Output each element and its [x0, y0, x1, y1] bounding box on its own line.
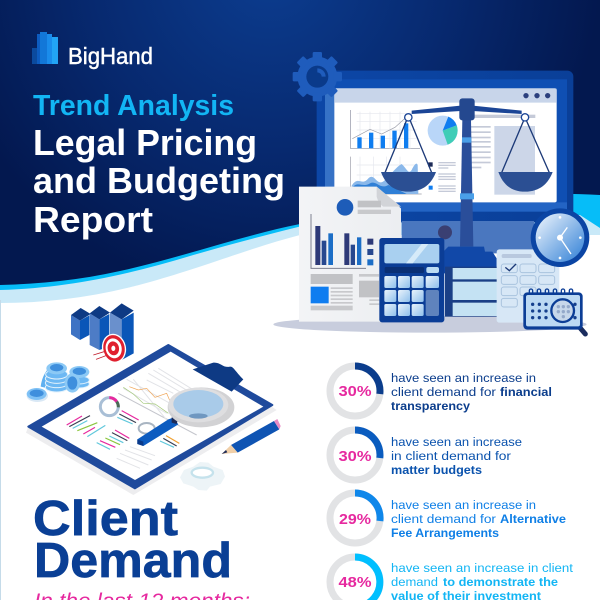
stat: 30% matter budgets: have seen an increase: [391, 435, 522, 449]
books: [445, 267, 498, 317]
shadow: [273, 316, 587, 333]
illustration: finance desk: [273, 42, 589, 334]
light blue wave: [0, 200, 600, 303]
heading: Trend Analysis: Trend Analysis: [33, 90, 234, 122]
title: Legal Pricing and Budgeting Report: Legal Pricing: [33, 122, 257, 163]
bar pillars: [71, 303, 134, 360]
title: Legal Pricing and Budgeting Report: and Budgeting: [33, 160, 285, 201]
clipboard: report charts: [67, 368, 203, 468]
document: [299, 187, 401, 322]
illustration: clipboard analysis: [26, 303, 281, 495]
stat: 29% alternative fee arrangements: have seen an increase in: [391, 498, 536, 512]
icon: target: [93, 331, 129, 365]
stat: 30% financial transparency: have seen an increase in: [391, 371, 536, 385]
stat: 30% financial transparency: client demand for: [391, 385, 496, 399]
stat: 30% matter budgets: 30%: [338, 448, 372, 465]
left edge line: [0, 300, 1, 600]
stat: 48% value of investment: 48%: [338, 574, 372, 591]
stat: 29% alternative fee arrangements: client demand for: [391, 512, 496, 526]
stat: 30% matter budgets: [330, 430, 522, 480]
screen: area chart: [350, 157, 422, 194]
stat: 29% alternative fee arrangements: [330, 493, 566, 543]
stat: 30% financial transparency: financial: [500, 385, 552, 399]
wall calendar: [497, 249, 559, 323]
stat: 30% financial transparency: transparency: [391, 399, 470, 413]
logo: BigHand: [32, 32, 153, 69]
stand: [402, 221, 534, 253]
cyan wave: [0, 190, 600, 290]
screen: text lines: [428, 115, 535, 195]
logo: BigHand: BigHand: [68, 43, 153, 69]
header background: [0, 0, 600, 285]
stat: 30% matter budgets: in client demand for: [391, 449, 511, 463]
magnifying glass: [137, 387, 234, 446]
icon: gear: [282, 42, 352, 112]
clipboard: [26, 345, 277, 495]
heading: Client Demand: Client: [33, 492, 178, 546]
stat: 48% value of investment: have seen an increase in client: [391, 561, 574, 575]
heading: Client Demand: [33, 492, 232, 588]
stat: 30% matter budgets: matter budgets: [391, 463, 482, 477]
calculator: [379, 238, 444, 322]
pencil: [222, 419, 281, 454]
screen: bar chart: [350, 110, 420, 148]
stat: 29% alternative fee arrangements: 29%: [339, 511, 371, 528]
screen: pie chart: [428, 116, 458, 146]
stat: 48% value of investment: to demonstrate the: [443, 575, 558, 589]
title: Legal Pricing and Budgeting Report: Report: [33, 199, 153, 240]
monitor: [317, 71, 573, 253]
scales of justice: [381, 98, 553, 273]
stat: 29% alternative fee arrangements: Alternative: [500, 512, 566, 526]
clock: [531, 208, 589, 267]
gear: [180, 462, 225, 491]
title: Legal Pricing and Budgeting Report: [33, 122, 285, 240]
stat: 30% financial transparency: [330, 366, 552, 416]
stat: 30% financial transparency: 30%: [338, 383, 372, 400]
stat: 48% value of investment: [330, 557, 574, 600]
pendulum knob: [438, 225, 452, 239]
desk calendar and magnifier: [523, 289, 585, 334]
stat: 29% alternative fee arrangements: Fee Arrangements: [391, 526, 499, 540]
icon: coins: [27, 362, 89, 402]
heading: Client Demand: Demand: [34, 534, 232, 588]
stat: 48% value of investment: demand: [391, 575, 438, 589]
